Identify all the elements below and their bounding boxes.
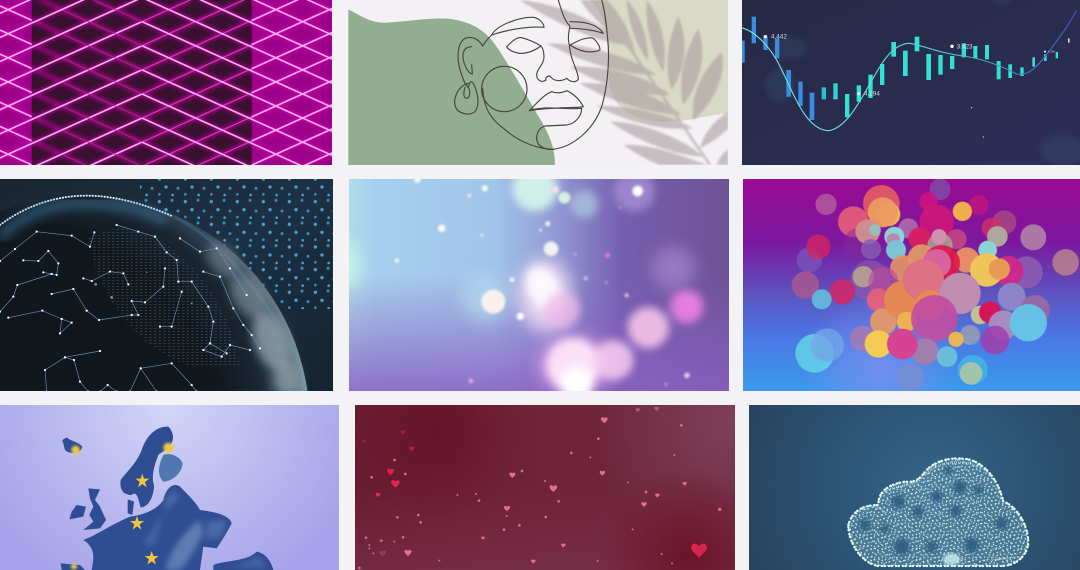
yellow stars bbox=[71, 443, 173, 570]
warm city lights bbox=[94, 272, 193, 304]
lighter terrain streaks bbox=[143, 490, 267, 570]
green organic shape bbox=[348, 9, 555, 165]
soft glows bbox=[338, 242, 695, 395]
value labels: 1.194 bbox=[1048, 50, 1055, 54]
olive organic shape bbox=[590, 0, 728, 122]
panel: blue and purple bokeh bbox=[349, 179, 1024, 568]
panel: digital earth with constellations bbox=[0, 179, 333, 391]
hexagon texture bbox=[765, 0, 1080, 165]
small bokeh points bbox=[395, 176, 690, 386]
globe bbox=[0, 196, 307, 392]
panel: particle cloud on teal-blue bbox=[749, 405, 1080, 570]
hearts pink bbox=[379, 407, 687, 564]
blue dot field bbox=[140, 179, 333, 309]
blue candles (falling) bbox=[741, 17, 814, 120]
panel: red background with floating hearts bbox=[355, 405, 1024, 570]
panel: colourful overlapping circles bbox=[743, 179, 1080, 568]
value labels: 4.294 bbox=[864, 91, 880, 98]
neon lines: bright chevrons bbox=[0, 0, 332, 165]
value labels bbox=[764, 34, 1055, 138]
palm leaf shadow bbox=[520, 0, 728, 165]
teal candles (rising) bbox=[822, 37, 1070, 117]
constellation lines bbox=[0, 225, 260, 392]
value labels: 3.423 bbox=[957, 43, 973, 50]
panel: neon pink lattice bbox=[0, 0, 332, 165]
panel: candlestick stock chart bbox=[742, 0, 1080, 165]
hearts red bbox=[362, 430, 707, 558]
panel: map of Europe with stars bbox=[0, 405, 339, 570]
particle cloud bbox=[845, 453, 1032, 568]
circle cluster bbox=[792, 179, 1079, 391]
value labels: 4.442 bbox=[771, 34, 787, 41]
panel: line-art face on green and olive shapes bbox=[348, 0, 728, 165]
face line drawing bbox=[455, 0, 609, 149]
trend curve bbox=[740, 10, 1077, 131]
lit cloud band bbox=[200, 236, 300, 395]
map landmasses bbox=[61, 427, 273, 570]
city light dots texture bbox=[87, 229, 240, 365]
globe rim glow bbox=[0, 196, 307, 392]
tiny dots bbox=[358, 424, 721, 569]
large blurred bokeh circles bbox=[512, 166, 703, 400]
